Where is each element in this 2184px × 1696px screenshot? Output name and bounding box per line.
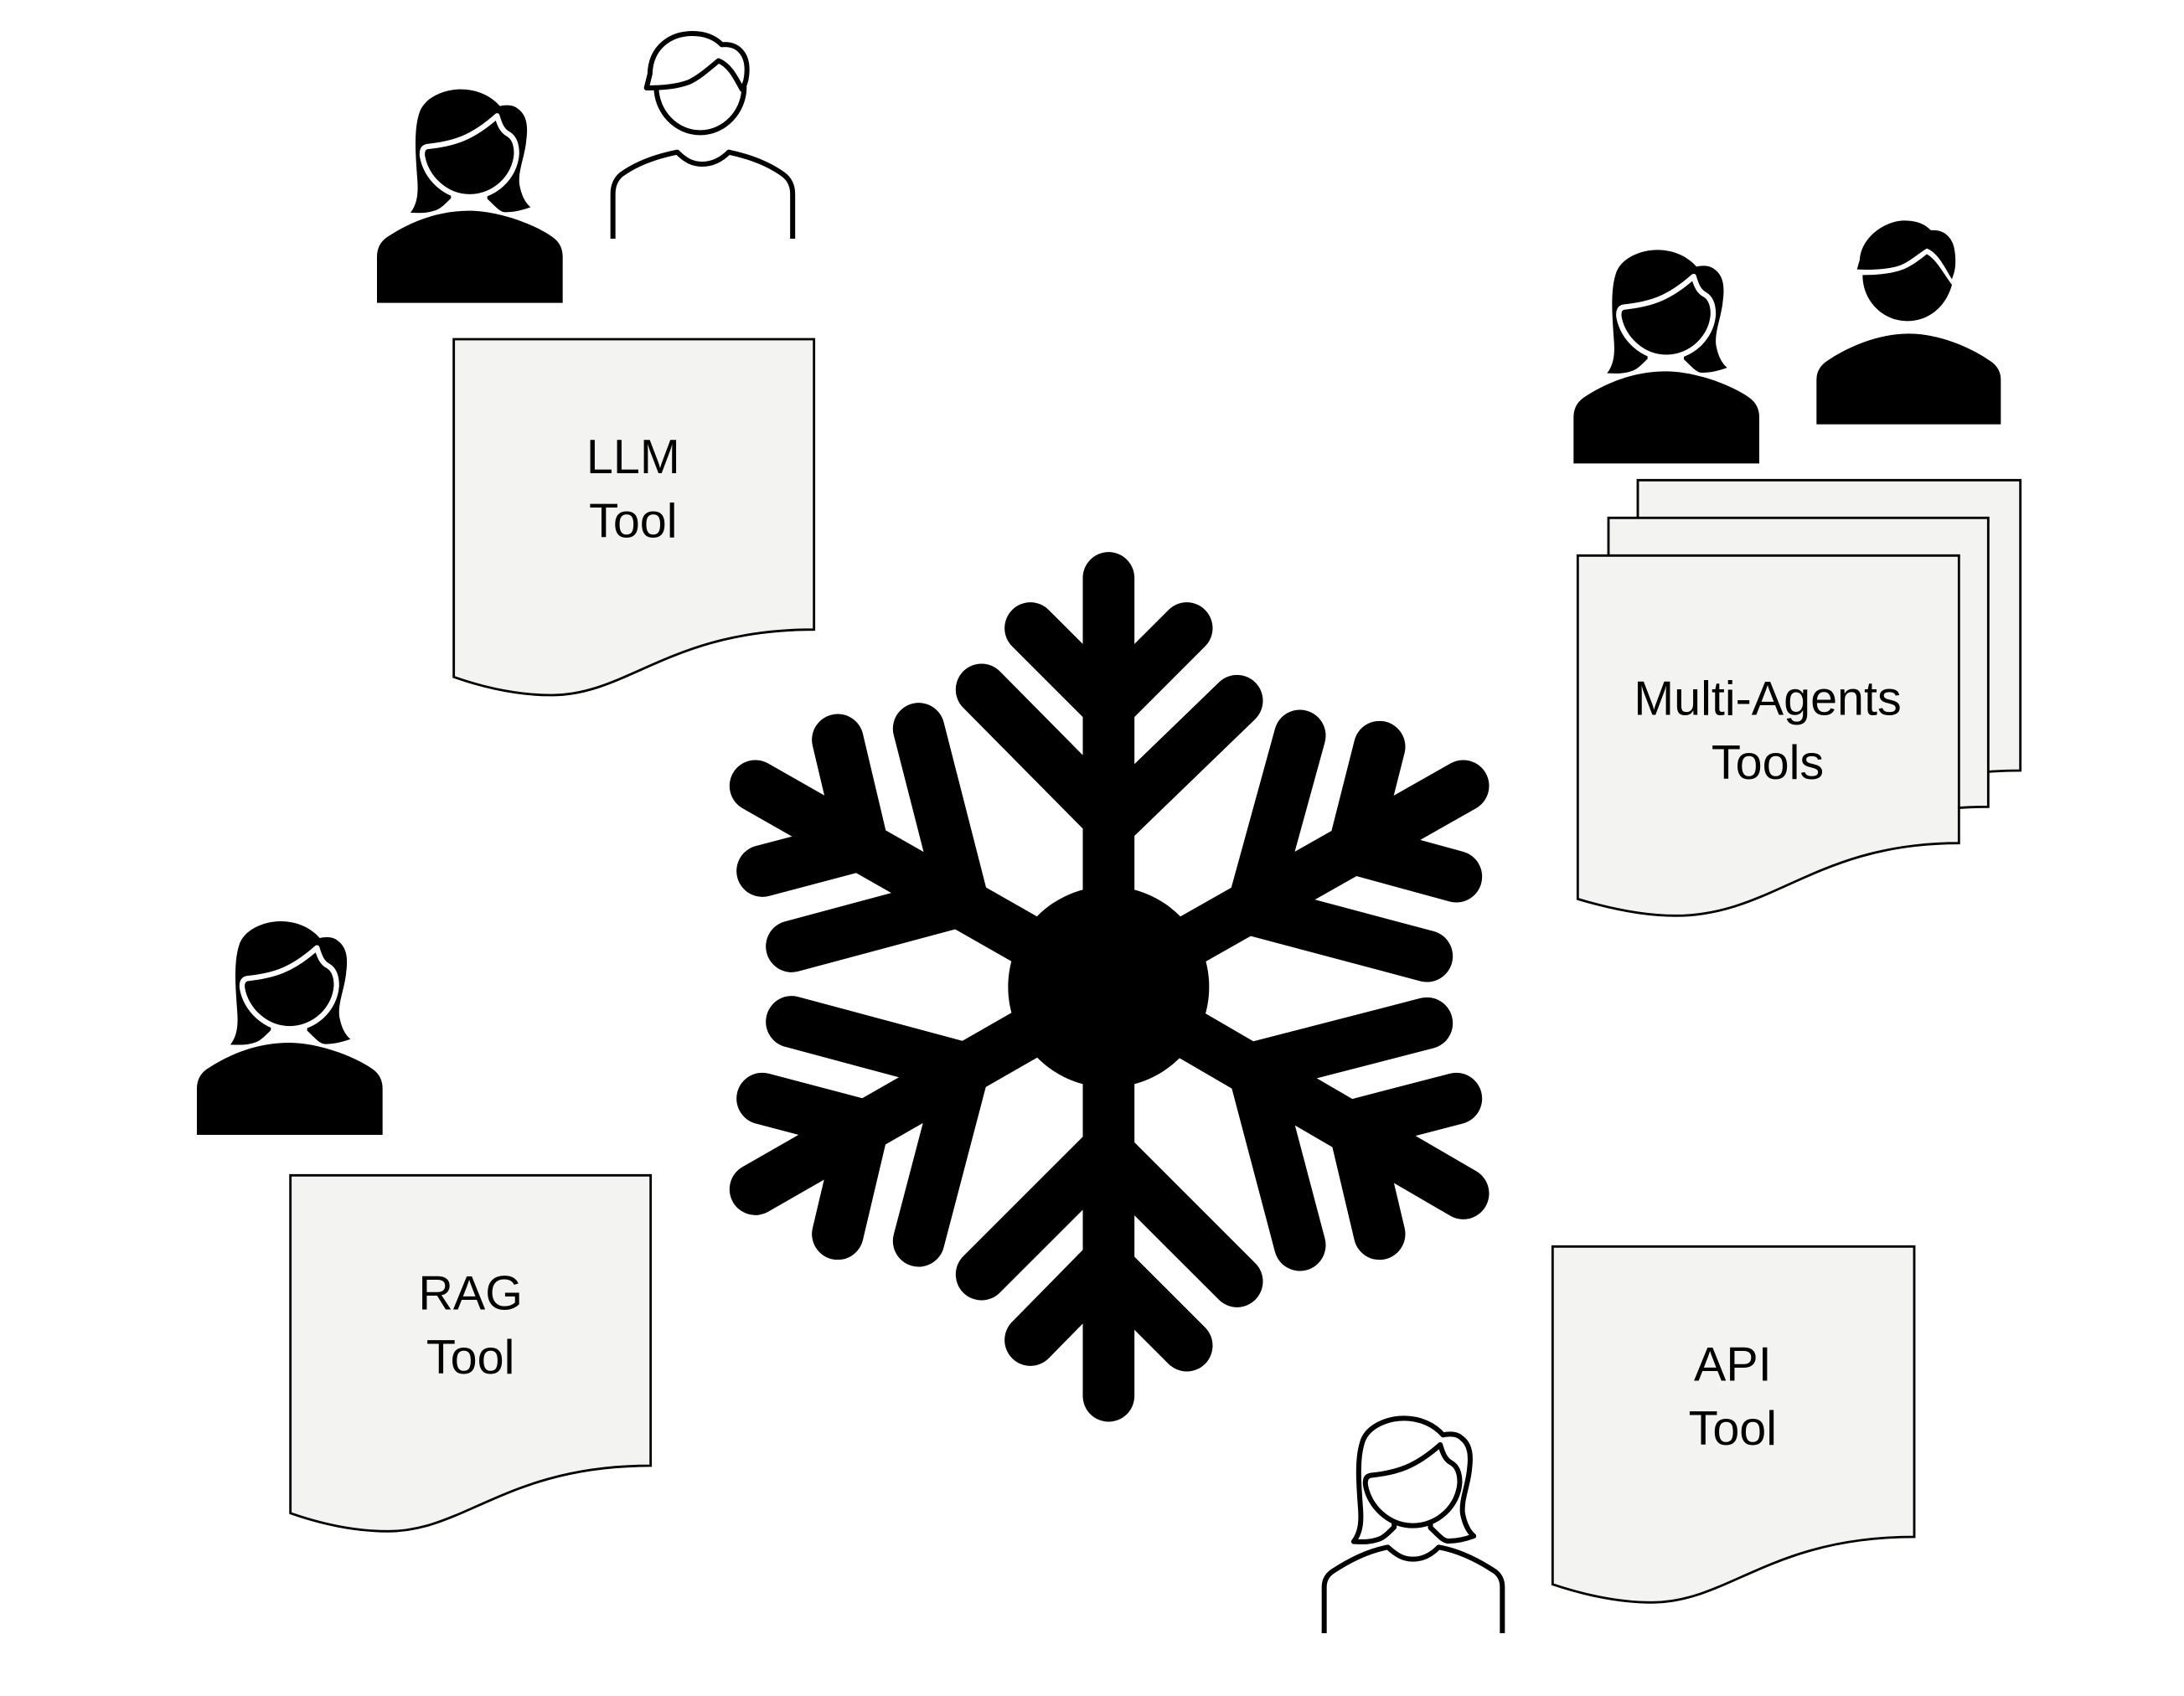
icon: man filled, Multi-Agents tools: [1816, 220, 2001, 425]
label: Multi-Agents Tools: Tools: [1712, 736, 1824, 790]
panel: API tool document: [1552, 1246, 1914, 1602]
label: LLM Tool: Tool: [589, 495, 678, 549]
label: API Tool: API: [1694, 1338, 1772, 1391]
label: RAG Tool: RAG: [418, 1266, 523, 1320]
label: API Tool: Tool: [1689, 1402, 1777, 1456]
icon: man outline, LLM tool: [613, 34, 793, 239]
panel: Multi-Agents tools document stack: [1577, 480, 2021, 915]
icon: woman filled, Multi-Agents tools: [1573, 250, 1759, 463]
icon: woman filled, LLM tool: [377, 90, 563, 303]
panel: LLM tool document: [454, 339, 814, 695]
icon: woman outline, API tool: [1324, 1418, 1502, 1633]
label: LLM Tool: LLM: [586, 430, 680, 484]
snowflake icon: [756, 578, 1464, 1396]
label: RAG Tool: Tool: [426, 1331, 514, 1384]
label: Multi-Agents Tools: Multi-Agents: [1634, 672, 1902, 725]
panel: RAG tool document: [291, 1175, 651, 1531]
icon: woman filled, RAG tool: [197, 921, 383, 1135]
